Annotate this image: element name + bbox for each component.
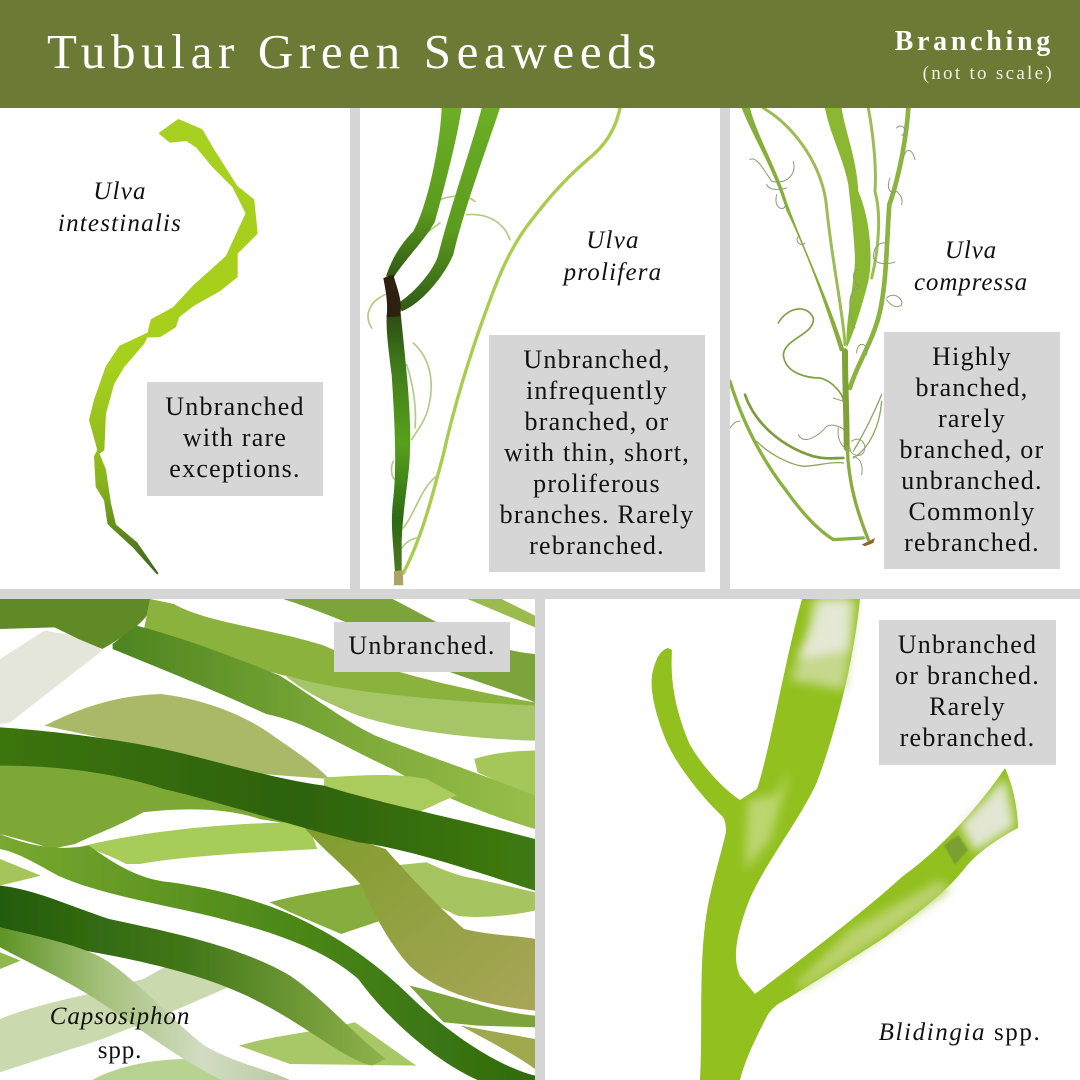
header note: not to scale: (not to scale) — [923, 63, 1054, 84]
callout: Ulva prolifera branching: branches. Rarely — [500, 500, 694, 528]
species label: Ulva compressa — [914, 237, 1028, 296]
callout: Ulva prolifera branching: Unbranched, — [523, 344, 671, 374]
species label: Capsosiphon: Capsosiphon — [50, 1003, 190, 1030]
callout: Ulva compressa branching: Commonly — [908, 496, 1036, 526]
species label: Capsosiphon: spp. — [98, 1037, 142, 1064]
callout: Ulva prolifera branching: proliferous — [533, 468, 661, 498]
callout: Ulva intestinalis branching: Unbranched — [165, 392, 305, 421]
callout: Ulva compressa branching — [884, 332, 1060, 569]
callout: Ulva prolifera branching: rebranched. — [529, 530, 665, 560]
species label: Ulva prolifera: Ulva — [586, 227, 640, 254]
photo: Capsosiphon — [0, 599, 535, 1080]
photo: Blidingia — [652, 599, 1018, 1080]
callout: Ulva intestinalis branching: exceptions. — [169, 454, 301, 483]
callout: Blidingia branching: Rarely — [929, 692, 1006, 721]
callout: Ulva compressa branching: branched, — [915, 372, 1029, 402]
photo: Ulva prolifera — [368, 108, 620, 585]
callout: Ulva prolifera branching: branched, or — [525, 406, 669, 436]
callout: Blidingia branching: rebranched. — [900, 723, 1035, 752]
species label: Ulva prolifera: prolifera — [564, 259, 662, 286]
callout: Blidingia branching: or branched. — [895, 661, 1040, 690]
callout: Ulva compressa branching: rebranched. — [904, 528, 1040, 556]
callout: Ulva intestinalis branching — [147, 382, 323, 496]
species label: Capsosiphon — [50, 1003, 190, 1064]
species label: Ulva compressa: compressa — [914, 269, 1028, 296]
callout: Ulva compressa branching: unbranched. — [901, 466, 1043, 494]
callout: Blidingia branching — [879, 620, 1056, 765]
callout: Ulva prolifera branching: with thin, short, — [504, 438, 690, 466]
species label: Ulva intestinalis — [58, 178, 182, 237]
callout: Capsosiphon branching — [334, 622, 510, 672]
callout: Ulva compressa branching: Highly — [932, 342, 1012, 370]
photo: Ulva compressa — [730, 108, 915, 546]
photo: Ulva intestinalis — [90, 120, 257, 573]
callout: Ulva intestinalis branching: with rare — [183, 423, 287, 452]
header label: branching: Branching — [895, 26, 1054, 57]
callout: Blidingia branching: Unbranched — [898, 630, 1037, 659]
species label: Ulva prolifera — [562, 227, 662, 286]
header band — [0, 0, 1080, 108]
species label: Ulva compressa: Ulva — [945, 237, 997, 264]
callout: Ulva compressa branching: branched, or — [900, 434, 1044, 464]
species label: Blidingia: Blidingia spp. — [879, 1019, 1041, 1046]
callout: Capsosiphon branching: Unbranched. — [348, 631, 496, 660]
callout: Ulva prolifera branching — [489, 335, 705, 572]
title: Tubular Green Seaweeds — [47, 24, 662, 79]
species label: Ulva intestinalis: Ulva — [93, 178, 147, 205]
callout: Ulva compressa branching: rarely — [938, 404, 1006, 432]
species label: Ulva intestinalis: intestinalis — [58, 210, 182, 237]
callout: Ulva prolifera branching: infrequently — [526, 376, 668, 404]
